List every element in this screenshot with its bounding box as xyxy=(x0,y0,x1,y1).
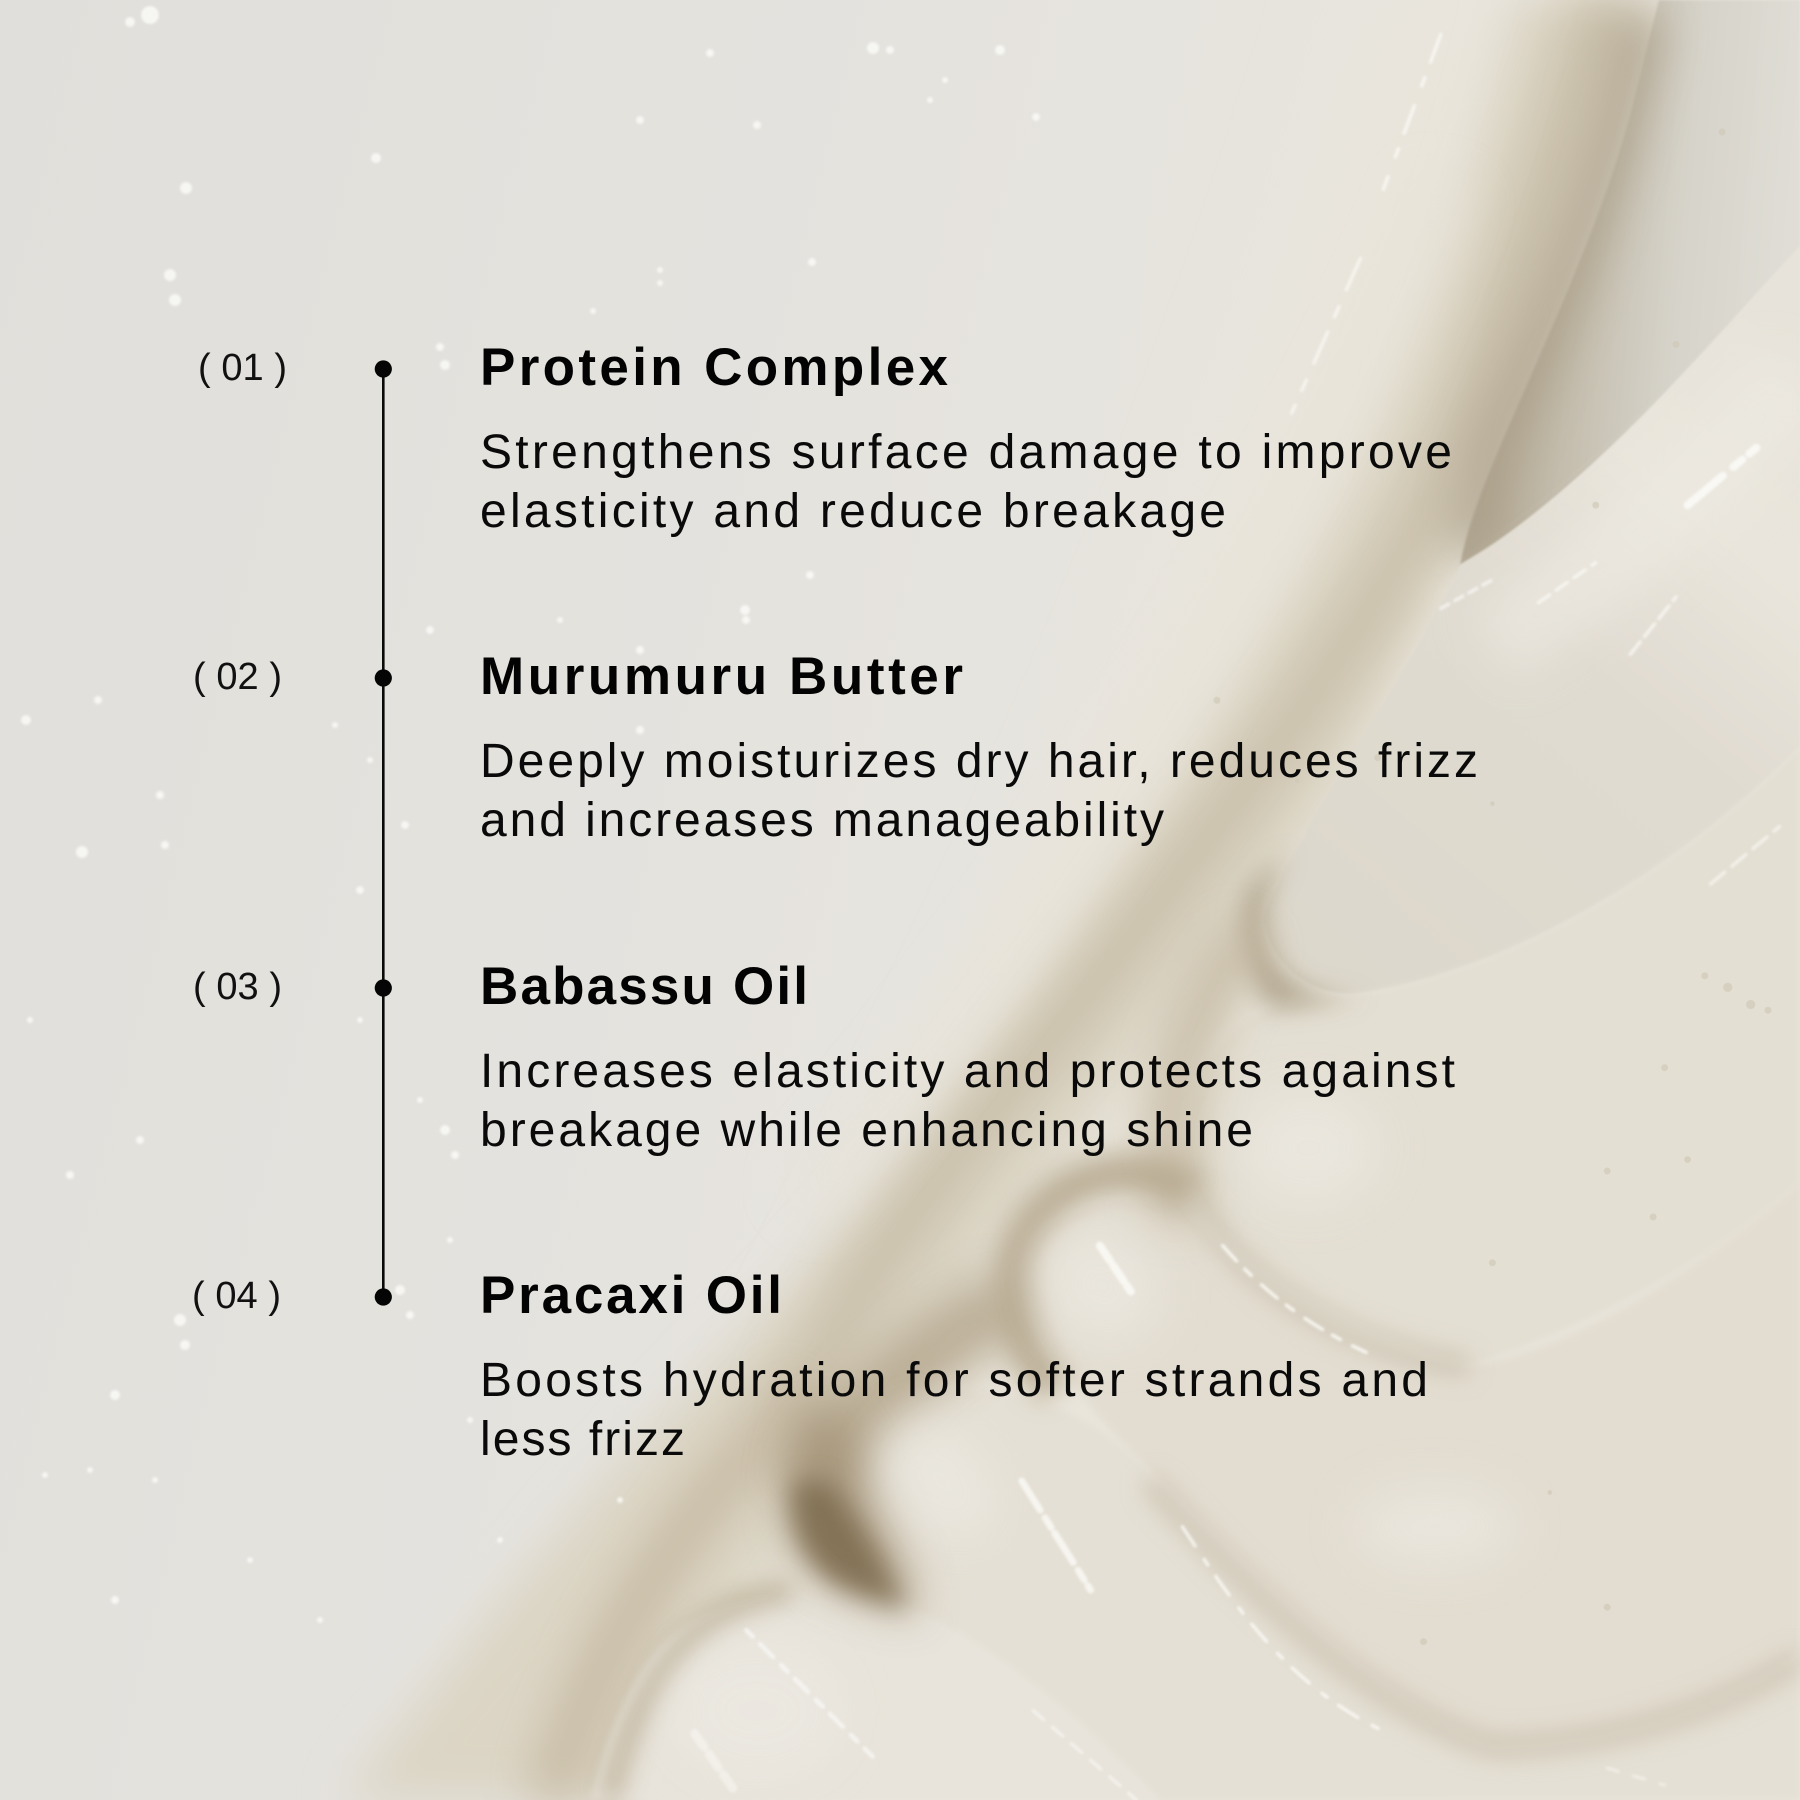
timeline node 1 xyxy=(375,360,392,378)
tube 2 xyxy=(1263,247,1800,994)
description xyxy=(480,735,1478,847)
timeline node 2 xyxy=(375,669,392,687)
description xyxy=(480,426,1452,538)
item 3: Babassu Oil xyxy=(193,957,1455,1157)
broad light patches xyxy=(672,1091,1515,1779)
heading: Protein Complex xyxy=(480,338,949,397)
tube 3 xyxy=(1182,746,1800,1366)
timeline node 3 xyxy=(375,979,392,997)
lower tube xyxy=(808,1391,1800,1800)
gloss highlights xyxy=(695,34,1779,1800)
bottom tube xyxy=(591,1593,1159,1800)
item 2: Murumuru Butter xyxy=(193,647,1478,847)
heading: Murumuru Butter xyxy=(480,647,963,706)
number 04: ( 04 ) xyxy=(192,1275,281,1317)
upper right cavity xyxy=(1460,0,1800,565)
description: breakage while enhancing shine xyxy=(480,1104,1253,1157)
description: and increases manageability xyxy=(480,794,1164,847)
pores xyxy=(1213,129,1771,1645)
number 01: ( 01 ) xyxy=(198,347,287,389)
description xyxy=(480,1045,1455,1157)
description: Strengthens surface damage to improve xyxy=(480,426,1452,479)
timeline xyxy=(375,360,392,1306)
description xyxy=(480,1354,1428,1466)
sparkles xyxy=(21,6,1040,1623)
item 1: Protein Complex xyxy=(198,338,1452,538)
description: Increases elasticity and protects against xyxy=(480,1045,1455,1098)
description: Deeply moisturizes dry hair, reduces frizz xyxy=(480,735,1478,788)
description: less frizz xyxy=(480,1413,685,1466)
description: elasticity and reduce breakage xyxy=(480,485,1226,538)
diagonal tan band xyxy=(344,0,1642,1800)
description: Boosts hydration for softer strands and xyxy=(480,1354,1428,1407)
heading: Pracaxi Oil xyxy=(480,1266,782,1325)
number 03: ( 03 ) xyxy=(193,966,282,1008)
item 4: Pracaxi Oil xyxy=(192,1266,1428,1466)
crevice shadows xyxy=(608,850,1800,1800)
timeline node 4 xyxy=(375,1288,392,1306)
heading: Babassu Oil xyxy=(480,957,808,1016)
tube 4 xyxy=(1027,1182,1800,1747)
number 02: ( 02 ) xyxy=(193,656,282,698)
